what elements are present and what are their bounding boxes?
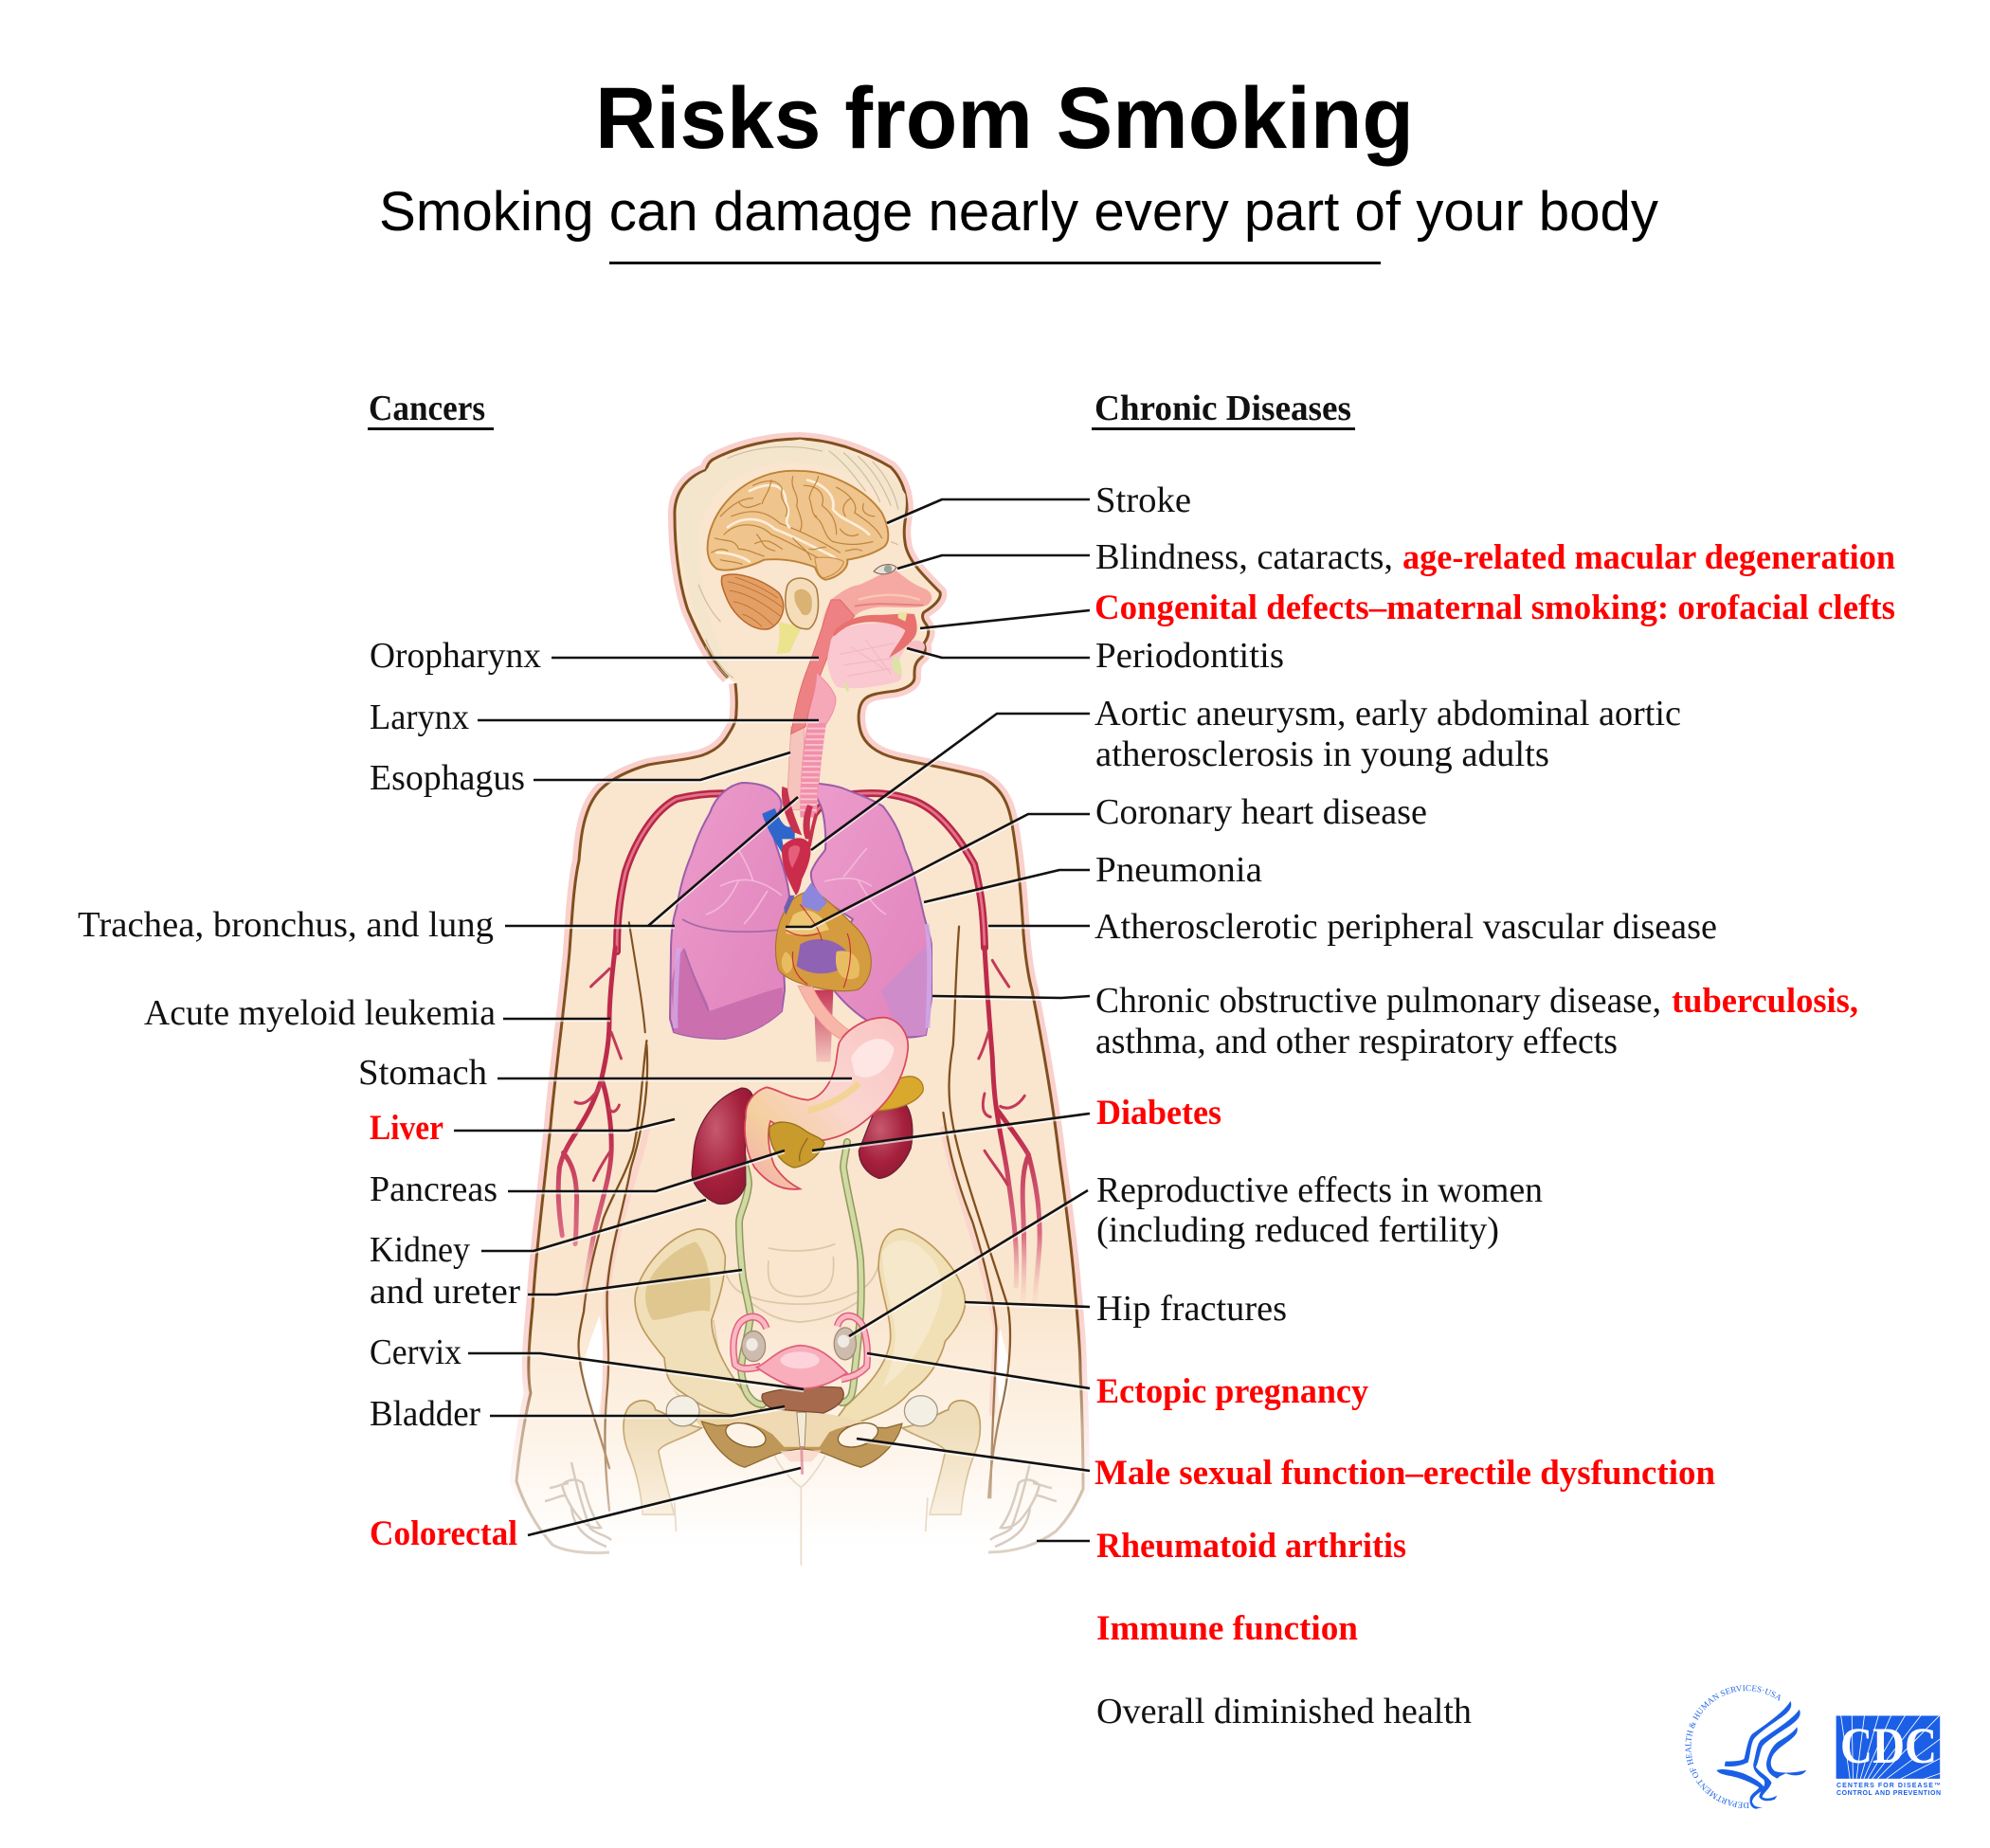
heart and great vessels [762,787,871,991]
label: colorectal: Colorectal [370,1514,517,1553]
label: bladder [370,1394,785,1434]
vessel branches [782,787,802,836]
chronic diseases column [786,389,1895,1731]
label: rheumatoid arthritis: Rheumatoid arthritis [1096,1527,1406,1566]
arm and torso contour lines [579,922,1010,1511]
heading: cancers: Cancers [369,389,485,428]
kidneys [692,1088,913,1204]
label: diabetes [812,1094,1221,1150]
label: esophagus [370,752,790,798]
sacrum outline [714,1243,891,1379]
palate [833,613,917,658]
brain stem [777,622,802,654]
label: acute myeloid leukemia: Acute myeloid leukemia [144,993,496,1033]
label: larynx: Larynx [370,698,469,737]
label: atherosclerotic peripheral vascular disease: Atherosclerotic peripheral vascular disease [1094,907,1717,947]
label: reproductive effects in women: Reproductive effects in women [1096,1170,1543,1210]
hair [677,440,906,678]
label: periodontitis: Periodontitis [1095,636,1284,676]
label: blindness, cataracts, macular degeneration [897,537,1895,577]
upper arm arteries [617,793,985,951]
label: colorectal [370,1468,801,1553]
esophagus tube [787,727,805,810]
label: congenital defects: Congenital defects–maternal smoking: orofacial clefts [1094,589,1895,627]
hands [545,1462,1057,1547]
label: pneumonia [924,850,1262,902]
superior vena cava [762,808,795,859]
logo: CDC: CDC [1840,1717,1937,1774]
logo: CDC: CENTERS FOR DISEASE™ [1836,1783,1941,1789]
label: pancreas [370,1150,785,1209]
pharynx tube [791,600,855,734]
tongue and oral cavity [827,623,908,688]
left kidney [692,1088,752,1204]
label: bladder: Bladder [370,1394,480,1434]
label: trachea, bronchus, and lung [78,797,798,945]
label: COPD, tuberculosis, asthma: asthma, and other respiratory effects [1095,1022,1618,1061]
esophagus, pharynx, trachea, mouth [787,571,932,817]
label: kidney and ureter: Kidney [370,1230,470,1270]
label: blindness, cataracts, macular degeneration: Blindness, cataracts, [1095,537,1393,577]
logo: CDC: CONTROL AND PREVENTION [1836,1790,1941,1797]
saliva gland marks [893,656,902,675]
skin silhouette [516,439,1083,1553]
anatomical body illustration [516,439,1083,1566]
heading: chronic diseases: Chronic Diseases [1094,389,1351,428]
label: liver: Liver [370,1109,443,1148]
label: overall diminished health: Overall diminished health [1096,1692,1472,1731]
trachea [800,723,826,817]
label: cervix: Cervix [370,1332,461,1372]
arteries of arms [558,793,1040,1312]
left hip wing [635,1229,763,1415]
title: Risks from Smoking [595,70,1414,167]
lungs [670,783,932,1039]
label: stomach: Stomach [358,1053,487,1093]
cancers column [78,389,852,1553]
left ischium bridge [672,1387,774,1430]
label: kidney and ureter [370,1200,742,1312]
label: trachea, bronchus, and lung: Trachea, bronchus, and lung [78,905,494,945]
label: COPD, tuberculosis, asthma: Chronic obstructive pulmonary disease, [1095,981,1661,1021]
label: hip fractures: Hip fractures [1096,1289,1287,1329]
label: pancreas: Pancreas [370,1169,498,1209]
spleen [875,1077,923,1111]
right ovary [834,1328,856,1360]
label: aortic aneurysm: atherosclerosis in young adults [1095,734,1549,774]
pubic ring [701,1413,902,1467]
ureters [739,1142,861,1404]
label: reproductive effects in women: (including reduced fertility) [1096,1210,1499,1250]
label: cervix [370,1332,804,1389]
brain and head organs [708,471,898,654]
label: aortic aneurysm [811,694,1681,850]
label: ectopic pregnancy: Ectopic pregnancy [1096,1372,1368,1411]
stomach and duodenum [745,1018,908,1189]
ear [786,578,818,629]
label: oropharynx: Oropharynx [370,636,541,676]
right kidney [859,1103,913,1178]
left hand [545,1462,611,1547]
cerebellum [721,574,784,629]
eye [874,542,898,574]
subtitle: Smoking can damage nearly every part of your body [379,181,1658,243]
label: coronary heart disease [786,792,1427,927]
logo: CDC [1836,1715,1941,1795]
rectum [798,1447,805,1475]
label: immune function: Immune function [1096,1609,1358,1648]
larynx [807,672,836,725]
label: stroke: Stroke [1095,480,1191,520]
face pink nasal area [822,571,932,632]
pancreas [769,1122,824,1168]
label: male sexual function: Male sexual function–erectile dysfunction [1094,1454,1715,1493]
right hand [990,1462,1057,1547]
label: diabetes: Diabetes [1096,1094,1221,1132]
label: reproductive effects in women [849,1170,1543,1336]
aorta arch [782,838,810,896]
label: pneumonia: Pneumonia [1095,850,1262,890]
label: ectopic pregnancy [867,1353,1368,1411]
logo: HHS: DEPARTMENT OF HEALTH & HUMAN SERVICES·USA [1685,1685,1781,1808]
right hip wing [829,1229,966,1434]
left lung [670,783,789,1039]
label: hip fractures [965,1289,1287,1329]
label: liver [370,1109,675,1148]
label: blindness, cataracts, macular degeneration: age-related macular degeneration [1402,538,1895,577]
reproductive organs and bladder [733,1316,867,1413]
label: COPD, tuberculosis, asthma [932,981,1858,1061]
pelvis bones [624,1229,980,1514]
descending aorta [814,990,833,1062]
label: coronary heart disease: Coronary heart disease [1095,792,1427,832]
forearm arteries [558,948,1040,1312]
label: aortic aneurysm: Aortic aneurysm, early abdominal aortic [1094,694,1681,734]
abdominal organs [745,986,923,1189]
uterus [757,1346,847,1388]
label: stroke [887,480,1191,523]
brain [708,471,888,580]
fallopian tubes [733,1316,767,1368]
bladder [762,1386,843,1413]
label: periodontitis [907,636,1284,676]
left ovary [742,1331,766,1362]
label: COPD, tuberculosis, asthma: tuberculosis, [1672,982,1858,1021]
label: esophagus: Esophagus [370,758,525,798]
leg and groin contour lines [674,1456,928,1566]
label: kidney and ureter: and ureter [370,1272,520,1312]
lower lip [908,641,925,653]
esophagus lower tube [798,986,849,1039]
label: male sexual function [857,1439,1715,1493]
right lung [811,783,932,1038]
right femur [902,1396,980,1514]
left femur [624,1396,701,1514]
heart body [775,882,871,991]
